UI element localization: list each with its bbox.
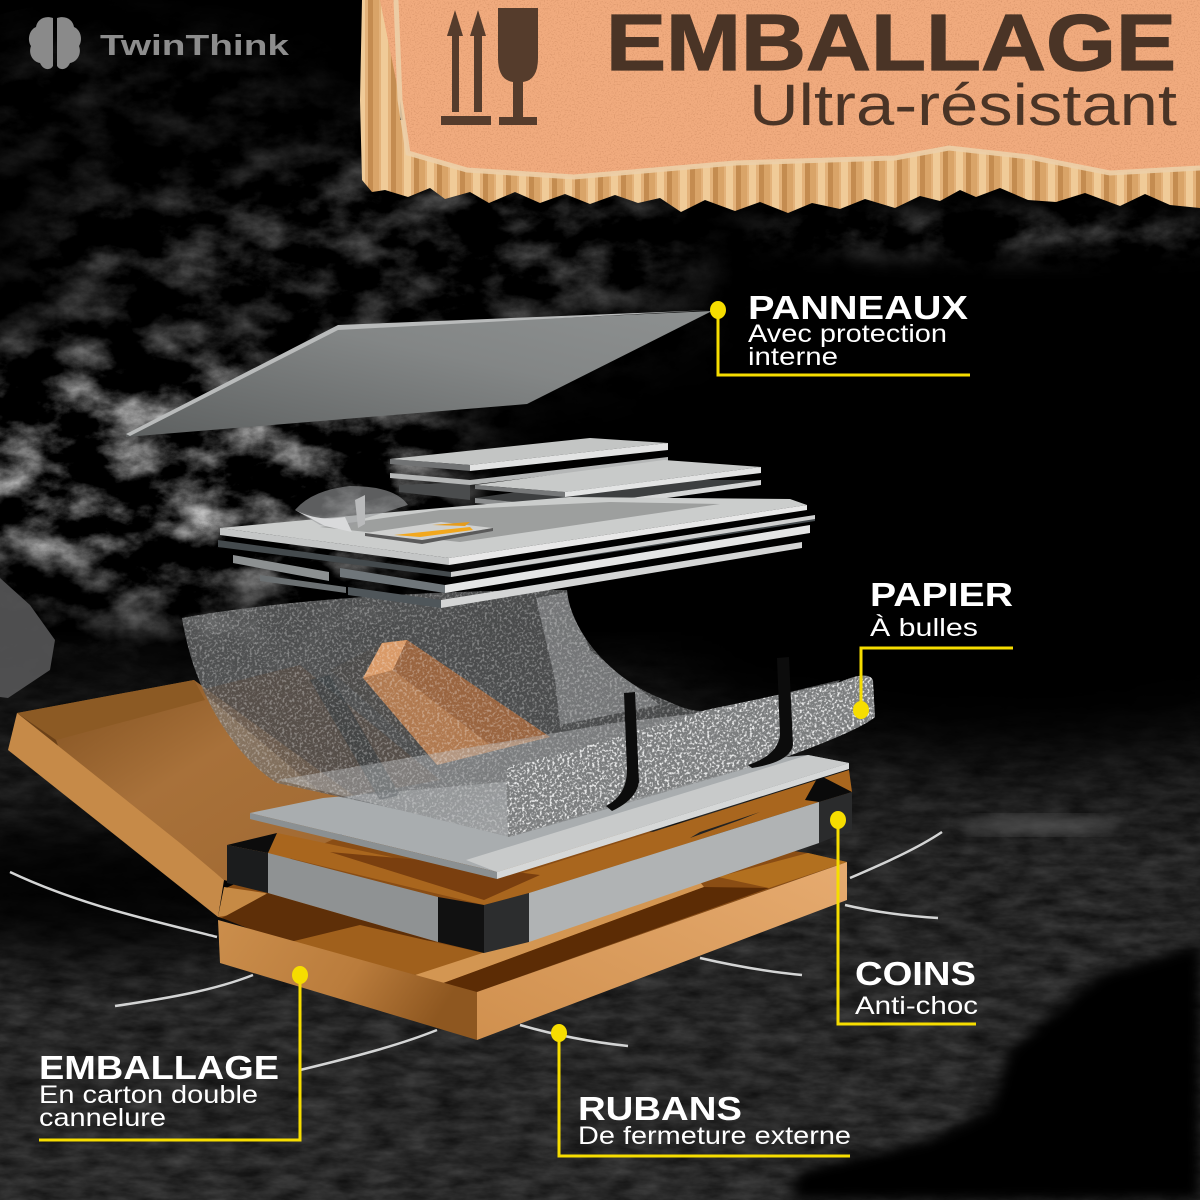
callout: emballage: cannelure — [39, 1104, 166, 1132]
callout: papier: PAPIER — [870, 576, 1013, 613]
black strap right — [748, 657, 793, 768]
paper: bubble wrap sheet — [182, 590, 875, 837]
back sheet of bubble wrap — [182, 590, 840, 837]
callout: emballage: EMBALLAGE — [39, 1049, 279, 1086]
callout: papier: À bulles — [870, 613, 978, 642]
subtitle: Ultra-résistant — [749, 73, 1177, 138]
box: open cardboard lid — [8, 680, 360, 917]
black strap left — [606, 692, 639, 811]
logo wordmark: TwinThink — [100, 30, 290, 62]
wires: loose white straps on the ground — [10, 832, 942, 1070]
front roll of bubble wrap — [500, 670, 880, 840]
orange tablet — [365, 522, 493, 544]
callout: panneaux: interne — [748, 343, 838, 371]
icon: this way up arrows — [441, 10, 491, 125]
callout: emballage — [39, 966, 308, 1140]
callout: emballage: En carton double — [39, 1081, 258, 1109]
panels: exploded stack — [126, 310, 815, 608]
logo: TwinThink — [29, 17, 290, 69]
torn corrugated edge — [360, 0, 1200, 213]
stack of small panels — [390, 438, 761, 512]
callout: coins: Anti-choc — [855, 992, 978, 1020]
large top panel — [126, 310, 712, 437]
cardboard paper face — [380, 0, 1200, 177]
callout: panneaux: PANNEAUX — [748, 289, 968, 326]
callout: rubans: RUBANS — [578, 1090, 742, 1127]
icon: fragile glass — [498, 8, 538, 125]
callout: rubans — [551, 1024, 851, 1156]
panel: lower gray foam sheet — [250, 755, 849, 879]
callout: coins: COINS — [855, 955, 976, 992]
callout: coins — [830, 811, 978, 1024]
panel: torn cardboard header — [360, 0, 1200, 213]
callout: papier — [853, 576, 1013, 719]
callout: panneaux: Avec protection — [748, 320, 947, 348]
title: EMBALLAGE — [606, 0, 1176, 87]
corner frame: foam corners and gray sides — [227, 770, 852, 953]
callout: rubans: De fermeture externe — [578, 1122, 851, 1150]
icon: brain — [29, 17, 81, 69]
bubble bag — [295, 486, 408, 532]
box: cardboard tray — [218, 800, 847, 1040]
callout: panneaux — [710, 289, 970, 375]
large panels — [218, 497, 815, 608]
